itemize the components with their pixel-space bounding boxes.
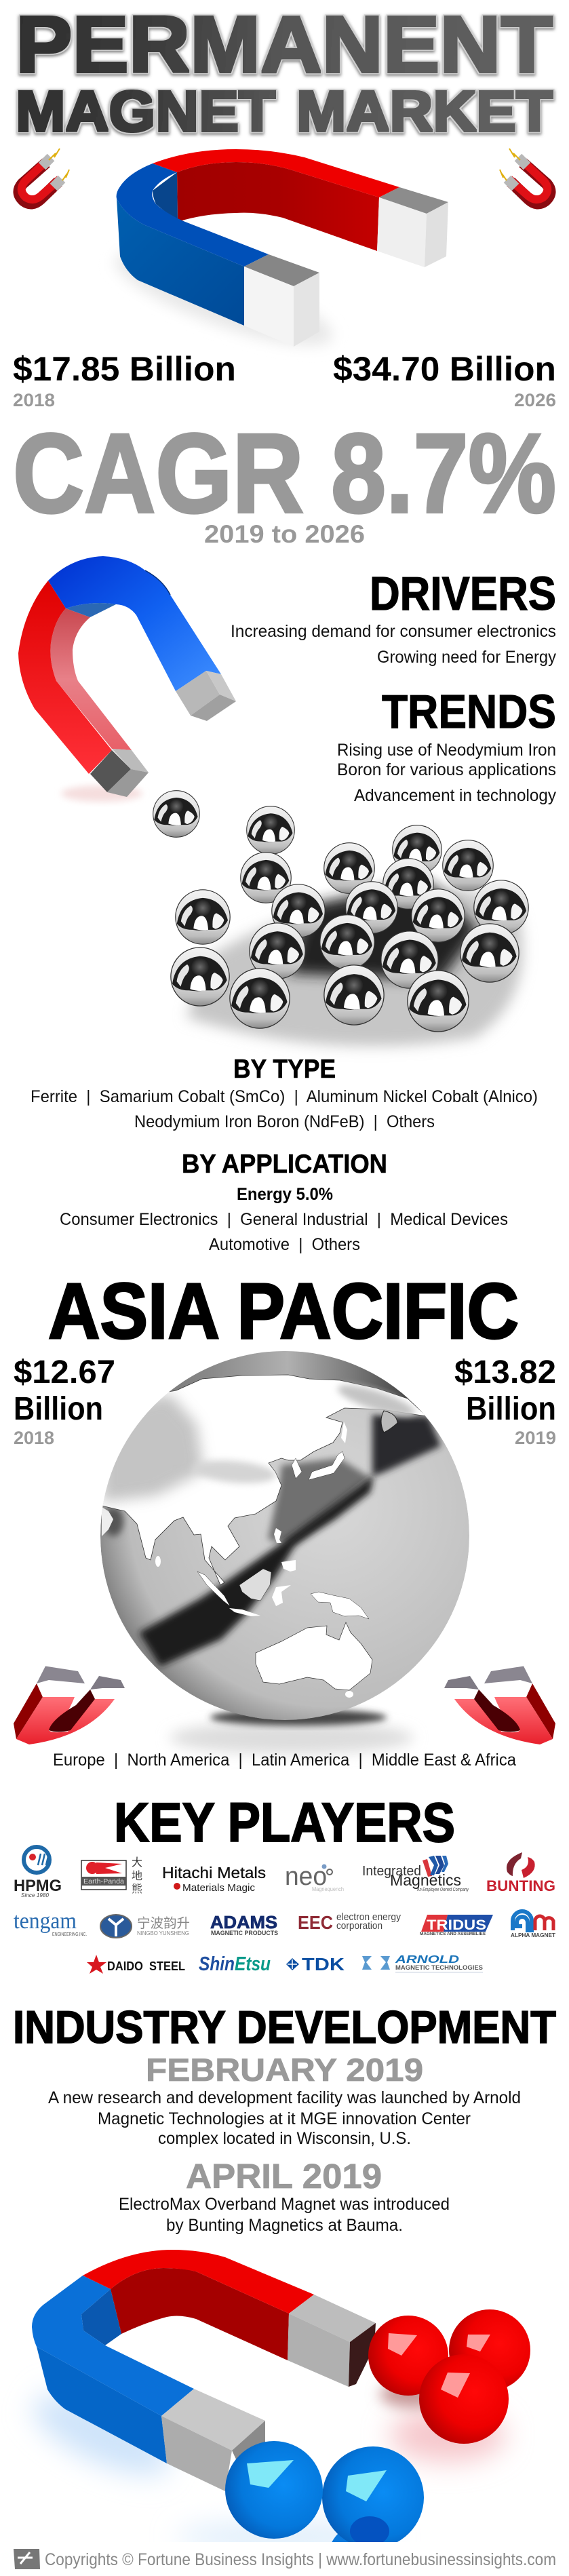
logo: neo Magnequench: neo: [285, 1862, 327, 1891]
land: Borneo: [239, 1569, 271, 1601]
illustration: red and blue horseshoe magnet: [18, 556, 236, 802]
development text: Bunting magnet: by Bunting Magnetics at Bauma.: [166, 2216, 403, 2235]
date: February 2019: FEBRUARY 2019: [146, 2052, 423, 2088]
title: MAGNET MARKET: [16, 79, 553, 143]
development text: Bunting magnet: ElectroMax Overband Magnet was introduced: [119, 2195, 450, 2214]
logo: Alpha Magnet: ALPHA MAGNET: [511, 1932, 555, 1938]
land: Sumatra: [197, 1572, 230, 1606]
drivers list: Growing need for Energy: [377, 648, 556, 667]
logo: Integrated Magnetics: [362, 1856, 469, 1892]
logo: Hitachi Metals: [162, 1864, 266, 1894]
trends list: Rising use of Neodymium Iron: [337, 741, 556, 760]
logo: Shin-Etsu: ShinEtsu: [199, 1953, 271, 1975]
other regions list: Europe | North America | Latin America | Middle East & Africa: [53, 1751, 516, 1770]
application segments: [60, 1210, 508, 1254]
logos: key players: [14, 1847, 555, 1975]
logo: Daido Steel: [87, 1955, 185, 1974]
trends list: [337, 741, 556, 805]
drivers list: [231, 622, 556, 667]
logo: Alpha Magnet: [511, 1911, 555, 1938]
heading: key players: KEY PLAYERS: [114, 1792, 455, 1854]
stat: Asia Pacific 2018: 2018: [14, 1428, 54, 1448]
land: Sulawesi: [272, 1585, 291, 1606]
application segments: Automotive | Others: [209, 1235, 360, 1254]
date: April 2019: APRIL 2019: [186, 2157, 382, 2196]
logo: Electron Energy Corporation: corporation: [336, 1920, 382, 1932]
stat: 2018 market value: 2018: [13, 390, 55, 410]
stat: Asia Pacific 2018: $12.67: [14, 1354, 115, 1390]
title: PERMANENT: [16, 0, 553, 90]
development text: Bunting magnet: [119, 2195, 450, 2235]
title: [16, 0, 553, 143]
icon: corner magnet left: [14, 1666, 125, 1744]
illustration: metallic globe: [100, 1350, 475, 1720]
logo: Earth-Panda: [81, 1856, 142, 1895]
trends list: Boron for various applications: [337, 760, 556, 779]
logo: Adams Magnetic Products: ADAMS: [210, 1912, 277, 1932]
logo: neo Magnequench: [285, 1862, 344, 1892]
logo: Electron Energy Corporation: EEC: [298, 1912, 333, 1933]
type segments: Neodymium Iron Boron (NdFeB) | Others: [134, 1112, 435, 1131]
stat: Asia Pacific 2019: 2019: [515, 1428, 556, 1448]
logo: Ningbo Yunsheng: 宁波韵升: [137, 1916, 190, 1931]
footer band: [0, 2542, 569, 2576]
development text: Arnold facility: complex located in Wisconsin, U.S.: [158, 2129, 411, 2148]
stat: 2026 market value: 2026: [514, 390, 556, 410]
logo: HPMG: Since 1980: [21, 1892, 50, 1898]
globe shadow and reflection: [170, 1709, 414, 1754]
stat: Asia Pacific 2019: Billion: [466, 1391, 556, 1427]
stat: Asia Pacific 2018: Billion: [14, 1391, 103, 1427]
development text: Arnold facility: [48, 2088, 521, 2148]
logo: Tridus: [420, 1915, 493, 1936]
land: New Guinea: [311, 1592, 369, 1619]
illustration: steel balls: [153, 791, 528, 1046]
heading: by type: BY TYPE: [233, 1055, 336, 1084]
logo: Earth-Panda: 大: [132, 1856, 142, 1869]
logo: Bunting: [486, 1852, 555, 1894]
stat: Asia Pacific 2019: [454, 1354, 556, 1448]
icon: corner magnet right: [444, 1666, 555, 1744]
logo: Electron Energy Corporation: [298, 1911, 401, 1933]
icon: Fortune Business Insights logo: [14, 2549, 40, 2569]
logo: Arnold Magnetic Technologies: [362, 1954, 483, 1972]
land: Java: [229, 1608, 260, 1616]
logo: Earth-Panda: 地: [132, 1870, 142, 1882]
logo: Hitachi Metals: Hitachi Metals: [162, 1864, 266, 1881]
logo: Integrated Magnetics: Integrated: [362, 1864, 421, 1879]
CAGR period: 2019 to 2026: [204, 520, 365, 548]
logo: HPMG: HPMG: [14, 1877, 62, 1895]
stat: Asia Pacific 2019: $13.82: [454, 1354, 556, 1390]
logo: Integrated Magnetics: An Employee Owned Company: [416, 1888, 469, 1892]
application callout: energy share: Energy 5.0%: [237, 1185, 333, 1204]
heading: Asia Pacific: ASIA PACIFIC: [48, 1267, 519, 1355]
logo: Electron Energy Corporation: electron energy: [336, 1911, 401, 1923]
logo: Earth-Panda: Earth-Panda: [83, 1878, 124, 1886]
logo: Tengam: ENGINEERING,INC.: [52, 1932, 87, 1937]
icon: small magnet right: [500, 149, 550, 203]
land: Australia: [256, 1622, 372, 1690]
logo: Adams Magnetic Products: MAGNETIC PRODUCTS: [211, 1930, 278, 1936]
logo: Daido Steel: DAIDO STEEL: [107, 1959, 185, 1973]
stat: Asia Pacific 2018: [14, 1354, 115, 1448]
logo: Bunting: BUNTING: [486, 1877, 555, 1894]
trends list: Advancement in technology: [354, 786, 556, 805]
development text: Arnold facility: A new research and development facility was launched by Arnold: [48, 2088, 521, 2107]
logo: Tridus: TRIDUS: [427, 1917, 486, 1933]
logo: Earth-Panda: 熊: [132, 1883, 142, 1895]
heading: by application: BY APPLICATION: [182, 1150, 387, 1179]
logo: Tridus: MAGNETICS AND ASSEMBLIES: [420, 1932, 486, 1936]
icon: small magnet left: [19, 149, 69, 203]
illustration: large horseshoe magnet: [106, 149, 448, 364]
stat: 2026 market value: $34.70 Billion: [333, 350, 556, 388]
logo: Arnold Magnetic Technologies: MAGNETIC TECHNOLOGIES: [395, 1964, 483, 1971]
logo: Arnold Magnetic Technologies: ARNOLD: [395, 1954, 460, 1966]
logo: TDK: [286, 1954, 345, 1974]
logo: TDK: TDK: [302, 1954, 345, 1974]
development text: Arnold facility: Magnetic Technologies at it MGE innovation Center: [98, 2109, 471, 2128]
stat: 2018 market value: $17.85 Billion: [13, 350, 236, 388]
logo: Ningbo Yunsheng: NINGBO YUNSHENG: [137, 1930, 189, 1936]
type segments: [31, 1087, 538, 1131]
drivers list: Increasing demand for consumer electronics: [231, 622, 556, 641]
stat: 2026 market value: [333, 350, 556, 410]
logo: Integrated Magnetics: Magnetics: [390, 1871, 461, 1889]
type segments: Ferrite | Samarium Cobalt (SmCo) | Aluminum Nickel Cobalt (Alnico): [31, 1087, 538, 1106]
logo: neo Magnequench: Magnequench: [312, 1886, 344, 1892]
stat: 2018 market value: [13, 350, 236, 410]
logo: HPMG: [14, 1847, 62, 1898]
illustration: magnet with red and blue balls: [26, 2250, 530, 2542]
application segments: Consumer Electronics | General Industrial | Medical Devices: [60, 1210, 508, 1229]
logo: Hitachi Metals: Materials Magic: [182, 1882, 256, 1894]
land: Eurasia: [102, 1375, 427, 1585]
logo: Ningbo Yunsheng: [100, 1915, 190, 1938]
logo: Tengam: tengam: [14, 1909, 77, 1934]
